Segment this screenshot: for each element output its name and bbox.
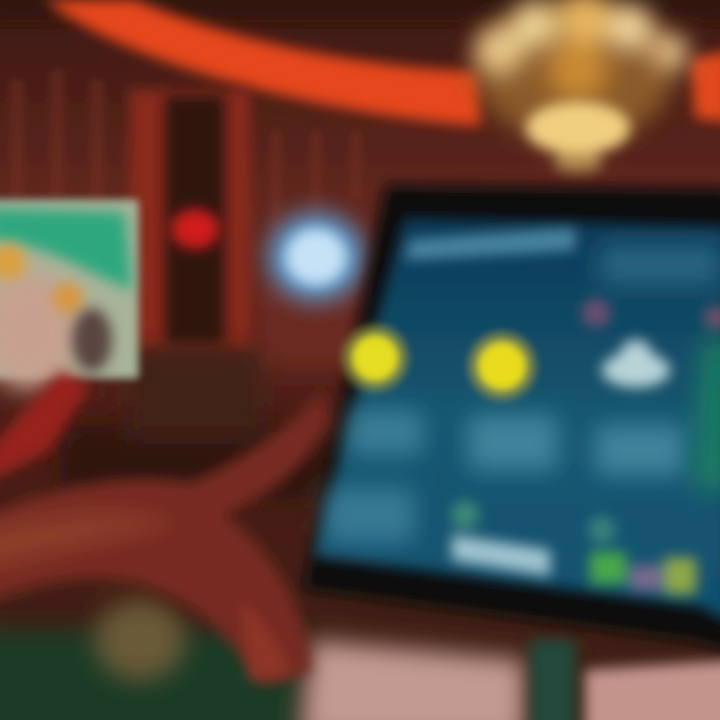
tablet screen bbox=[314, 218, 720, 622]
small red icons bbox=[582, 299, 610, 327]
green object at right edge bbox=[695, 340, 720, 490]
lower chart: pale bars bbox=[451, 501, 550, 576]
orange ceiling band bbox=[45, 0, 720, 126]
chandelier bbox=[475, 0, 688, 172]
sun icon middle bbox=[468, 332, 536, 400]
sun icon left bbox=[342, 325, 408, 391]
green poster on left bbox=[0, 200, 138, 480]
cloud icon bbox=[602, 340, 670, 387]
glowing blue light bbox=[268, 213, 364, 301]
hand with pointing finger bbox=[0, 392, 330, 685]
forecast text blocks bbox=[325, 410, 685, 543]
table bottom: green felt and cards bbox=[0, 600, 720, 720]
tablet body bbox=[303, 185, 720, 652]
lower chart: coloured bars bbox=[588, 516, 696, 594]
red column with signal light bbox=[130, 90, 260, 440]
screen header text bbox=[405, 228, 575, 260]
